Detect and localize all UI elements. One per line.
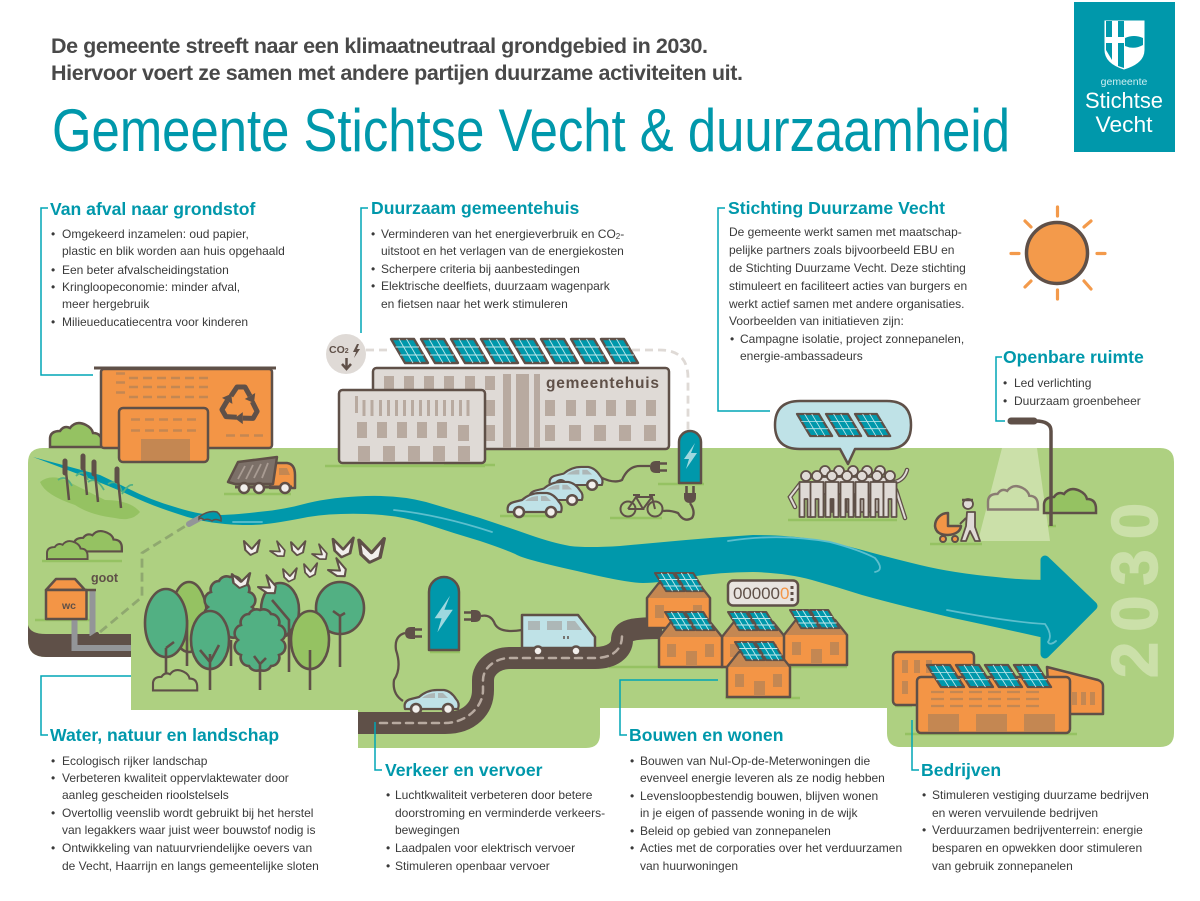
paragraph: Voorbeelden van initiatieven zijn:	[729, 314, 904, 328]
logo text: Stichtse	[1085, 88, 1163, 113]
icon: wc house: wc	[61, 600, 76, 612]
list: •	[371, 279, 375, 293]
people group	[790, 466, 907, 518]
municipal building	[326, 334, 688, 463]
list: uitstoot en het verlagen van de energiekosten	[381, 244, 624, 258]
icon: shield	[1105, 21, 1144, 69]
list: besparen en opwekken door stimuleren	[932, 841, 1142, 855]
list: •	[630, 841, 634, 855]
list: doorstroming en verminderde verkeers-	[395, 806, 605, 820]
list: •	[51, 280, 55, 294]
soil layer	[28, 625, 131, 657]
list: •	[386, 841, 390, 855]
house: front	[727, 642, 790, 697]
list: •	[51, 227, 55, 241]
intro text	[51, 34, 743, 85]
paragraph: •	[730, 332, 734, 346]
intro text: De gemeente streeft naar een klimaatneutraal grondgebied in 2030.	[51, 34, 708, 58]
heading: Duurzaam gemeentehuis	[371, 198, 579, 218]
list: •	[630, 824, 634, 838]
heading: Verkeer en vervoer	[385, 760, 543, 780]
bush: forest	[153, 670, 197, 690]
list: van gebruik zonnepanelen	[932, 859, 1073, 873]
heading: Stichting Duurzame Vecht	[728, 198, 945, 218]
list: Een beter afvalscheidingstation	[62, 263, 229, 277]
list: Stimuleren openbaar vervoer	[395, 859, 550, 873]
bush: afval	[50, 423, 102, 447]
list	[51, 754, 319, 873]
label: gemeentehuis: gemeentehuis	[546, 375, 659, 392]
icon: sun	[1011, 207, 1105, 299]
list: •	[371, 262, 375, 276]
icon: CO2	[326, 334, 366, 374]
list: evenveel energie leveren als ze nodig hebben	[640, 771, 885, 785]
icon: CO2: CO2	[329, 344, 349, 356]
list: Milieueducatiecentra voor kinderen	[62, 315, 248, 329]
list: van huurwoningen	[640, 859, 738, 873]
list: Led verlichting	[1014, 376, 1091, 390]
list: Duurzaam groenbeheer	[1014, 394, 1141, 408]
list: meer hergebruik	[62, 297, 150, 311]
list: Omgekeerd inzamelen: oud papier,	[62, 227, 249, 241]
panel: van afval naar grondstof	[41, 199, 285, 375]
list: Kringloopeconomie: minder afval,	[62, 280, 240, 294]
list: Ecologisch rijker landschap	[62, 754, 208, 768]
list: •	[922, 788, 926, 802]
list	[922, 788, 1149, 873]
list: •	[922, 823, 926, 837]
list: Ontwikkeling van natuurvriendelijke oevers van	[62, 841, 312, 855]
person with stroller	[935, 499, 980, 542]
street light	[978, 421, 1096, 541]
panel: duurzaam gemeentehuis	[361, 198, 624, 333]
paragraph: Campagne isolatie, project zonnepanelen,	[740, 332, 964, 346]
house: far right	[784, 610, 847, 665]
intro text: Hiervoor voert ze samen met andere partijen duurzame activiteiten uit.	[51, 61, 743, 85]
paragraph: de Stichting Duurzame Vecht. Deze stichting	[729, 261, 966, 275]
list: plastic en blik worden aan huis opgehaald	[62, 244, 285, 258]
business buildings	[893, 652, 1103, 733]
list: Levensloopbestendig bouwen, blijven wonen	[640, 789, 878, 803]
paragraph: energie-ambassadeurs	[740, 349, 863, 363]
list: •	[630, 754, 634, 768]
list: •	[51, 841, 55, 855]
icon: recycling	[217, 387, 260, 427]
icon: wc house	[46, 579, 96, 619]
road	[358, 628, 662, 723]
list: de Vecht, Haarrijn en langs gemeentelijke sloten	[62, 859, 319, 873]
panel: bouwen en wonen	[620, 680, 902, 873]
energy meter: 00000	[733, 584, 780, 603]
list: en fietsen naar het werk stimuleren	[381, 297, 568, 311]
paragraph: stimuleert en faciliteert acties van burgers en	[729, 279, 967, 293]
heading: Bouwen en wonen	[629, 725, 783, 745]
logo text: Vecht	[1096, 112, 1152, 137]
list: Scherpere criteria bij aanbestedingen	[381, 262, 580, 276]
chart: 2030 year label: 2030	[1098, 503, 1171, 678]
heading: Bedrijven	[921, 760, 1001, 780]
list: •	[1003, 394, 1007, 408]
list: bewegingen	[395, 823, 460, 837]
label: goot: goot	[91, 571, 119, 585]
list: Bouwen van Nul-Op-de-Meterwoningen die	[640, 754, 870, 768]
list	[630, 754, 902, 873]
house: middle right	[722, 612, 785, 667]
list: •	[51, 315, 55, 329]
logo	[1074, 2, 1175, 152]
house: middle left	[659, 612, 722, 667]
list: •	[1003, 376, 1007, 390]
list: Verbeteren kwaliteit oppervlaktewater door	[62, 771, 289, 785]
list	[51, 227, 285, 329]
pipes and wc	[46, 512, 221, 648]
list: •	[386, 859, 390, 873]
list: •	[630, 789, 634, 803]
list: Beleid op gebied van zonnepanelen	[640, 824, 831, 838]
bicycle	[620, 495, 662, 516]
list: Overtollig veenslib wordt gebruikt bij het herstel	[62, 806, 313, 820]
heading: Openbare ruimte	[1003, 347, 1144, 367]
list: •	[51, 771, 55, 785]
river arrow	[33, 457, 1093, 654]
building: front wing	[339, 390, 485, 463]
list: 2	[616, 232, 621, 241]
panel: verkeer en vervoer	[375, 722, 605, 873]
list: Verduurzamen bedrijventerrein: energie	[932, 823, 1143, 837]
list: aanleg gescheiden rioolstelsels	[62, 788, 229, 802]
list: Verminderen van het energieverbruik en CO	[381, 227, 616, 241]
heading: Water, natuur en landschap	[50, 725, 279, 745]
list: Acties met de corporaties over het verduurzamen	[640, 841, 902, 855]
charger: road	[394, 577, 522, 701]
list	[1003, 376, 1141, 408]
list: en weren vervuilende bedrijven	[932, 806, 1098, 820]
list	[386, 788, 605, 873]
panel: bedrijven	[912, 720, 1149, 873]
list: •	[51, 806, 55, 820]
building: afval recycling	[94, 368, 276, 462]
logo text: gemeente	[1101, 76, 1148, 88]
list: •	[51, 263, 55, 277]
energy meter: 0	[780, 584, 789, 603]
speech bubble	[775, 401, 911, 464]
paragraph: De gemeente werkt samen met maatschap-	[729, 225, 962, 239]
energy meter	[728, 580, 798, 606]
list: •	[371, 227, 375, 241]
list: van legakkers waar juist weer bouwstof nodig is	[62, 823, 315, 837]
panel: stichting duurzame vecht	[718, 198, 967, 411]
birds	[232, 538, 384, 598]
houses	[647, 573, 847, 697]
paragraph: pelijke partners zoals bijvoorbeeld EBU en	[729, 243, 954, 257]
landscape ground	[28, 448, 1174, 748]
charger: gemeentehuis	[663, 431, 701, 520]
paragraph	[728, 225, 967, 363]
ground shadow strips	[35, 465, 1077, 734]
bushes: left	[47, 531, 122, 559]
building: back wing	[373, 368, 669, 449]
van	[522, 615, 595, 656]
list: Elektrische deelfiets, duurzaam wagenpark	[381, 279, 611, 293]
list: Laadpalen voor elektrisch vervoer	[395, 841, 575, 855]
truck	[228, 457, 295, 493]
list: Stimuleren vestiging duurzame bedrijven	[932, 788, 1149, 802]
heading: Van afval naar grondstof	[50, 199, 255, 219]
list: Luchtkwaliteit verbeteren door betere	[395, 788, 593, 802]
building: front hall	[119, 408, 208, 462]
reeds	[40, 456, 140, 519]
panel: openbare ruimte	[996, 347, 1144, 421]
car: road	[405, 690, 459, 714]
list	[371, 227, 624, 311]
title: Gemeente Stichtse Vecht & duurzaamheid	[52, 97, 1010, 164]
logo text	[1085, 76, 1163, 137]
electric cars	[508, 461, 667, 517]
panel: water, natuur en landschap	[41, 676, 319, 873]
list: -	[620, 227, 624, 241]
trees	[145, 576, 364, 690]
list: in je eigen of passende woning in de wijk	[640, 806, 858, 820]
list: •	[386, 788, 390, 802]
solar panels: roof	[391, 339, 638, 363]
house: top	[647, 573, 710, 628]
list: •	[51, 754, 55, 768]
paragraph: werkt actief samen met andere organisaties.	[728, 297, 964, 311]
